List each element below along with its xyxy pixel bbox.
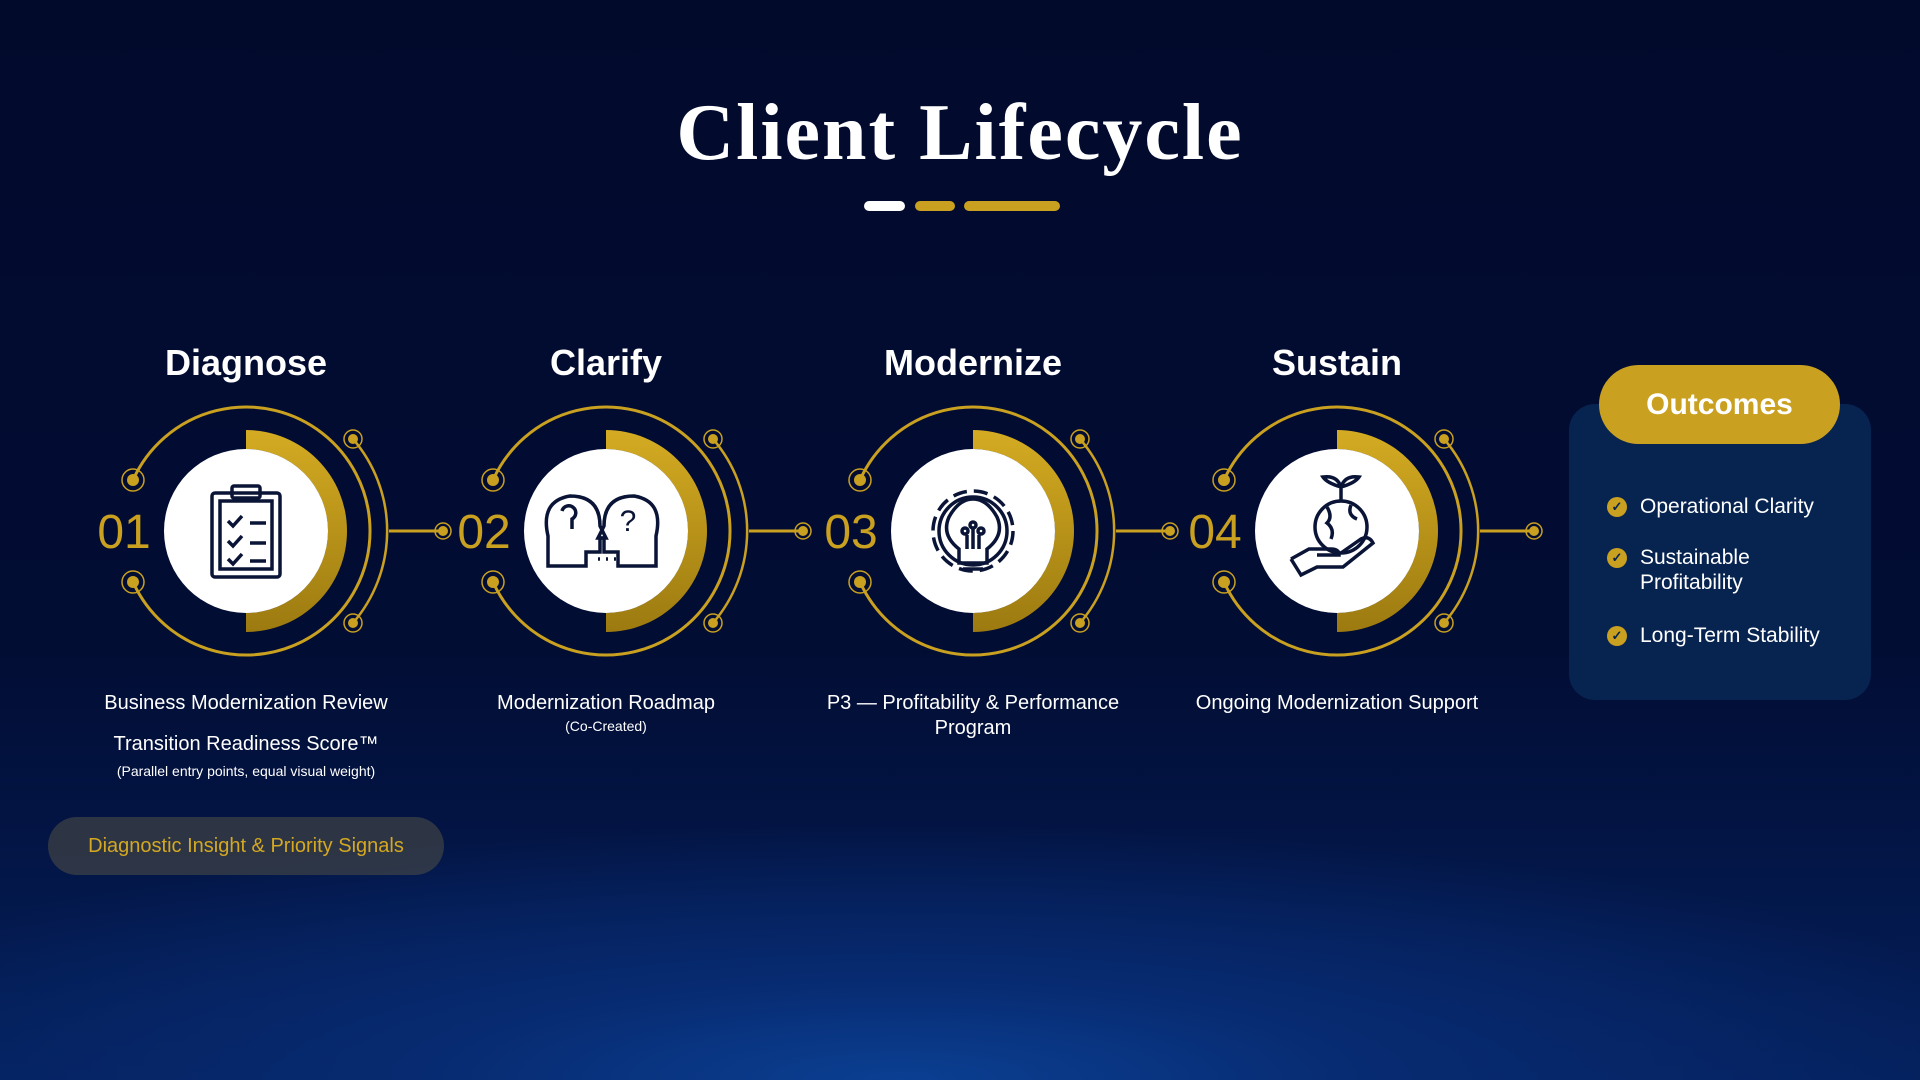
- step 03 circle: [824, 407, 1178, 655]
- icon: gear bulb: [933, 491, 1013, 571]
- title: Client Lifecycle: [676, 89, 1244, 177]
- text: Modernize description: P3 — Profitability & Performance Program: [827, 692, 1119, 739]
- text: Clarify description: [497, 692, 715, 734]
- text: Clarify description: Modernization Roadmap: [497, 692, 715, 714]
- outcome items: ✓: [1612, 499, 1622, 514]
- text: Diagnose description: Business Modernization Review: [104, 692, 388, 714]
- outcome items: Operational Clarity: [1640, 495, 1814, 518]
- icon: hand globe: [1291, 477, 1373, 575]
- step 04 circle: [1188, 407, 1542, 655]
- text: Diagnose description: Transition Readiness Score™: [114, 733, 378, 755]
- panel: outcomes: [1569, 404, 1871, 700]
- heading: Sustain: Sustain: [1272, 342, 1402, 383]
- outcome items: Long-Term Stability: [1640, 624, 1820, 647]
- heading: Clarify: Clarify: [550, 342, 662, 383]
- step 02 circle: 02: [457, 506, 511, 559]
- text: Sustain description: Ongoing Modernization Support: [1196, 692, 1478, 714]
- icon: heads: [546, 496, 658, 566]
- text: Clarify description: (Co-Created): [565, 718, 647, 734]
- outcome items: ✓: [1612, 550, 1622, 565]
- icon: heads: ?: [620, 505, 636, 538]
- outcome items: Profitability: [1640, 571, 1743, 594]
- outcome items: ✓: [1612, 628, 1622, 643]
- step 01 circle: [97, 407, 451, 655]
- outcomes heading pill: [1599, 365, 1840, 444]
- title underline dashes: [864, 201, 1060, 211]
- step 03 circle: 03: [824, 506, 878, 559]
- step 02 circle: [457, 407, 811, 655]
- step 01 circle: 01: [97, 506, 151, 559]
- heading: Modernize: Modernize: [884, 342, 1062, 383]
- pill: diagnostic insight: Diagnostic Insight & Priority Signals: [88, 835, 404, 857]
- heading: Diagnose: Diagnose: [165, 342, 327, 383]
- step 04 circle: 04: [1188, 506, 1242, 559]
- pill: diagnostic insight: [48, 817, 444, 875]
- outcome items: [1607, 495, 1820, 647]
- icon: clipboard: [212, 486, 280, 577]
- text: Diagnose description: [104, 692, 388, 779]
- outcome items: Sustainable: [1640, 546, 1750, 569]
- outcomes heading pill: Outcomes: [1646, 388, 1793, 421]
- text: Diagnose description: (Parallel entry points, equal visual weight): [117, 763, 375, 779]
